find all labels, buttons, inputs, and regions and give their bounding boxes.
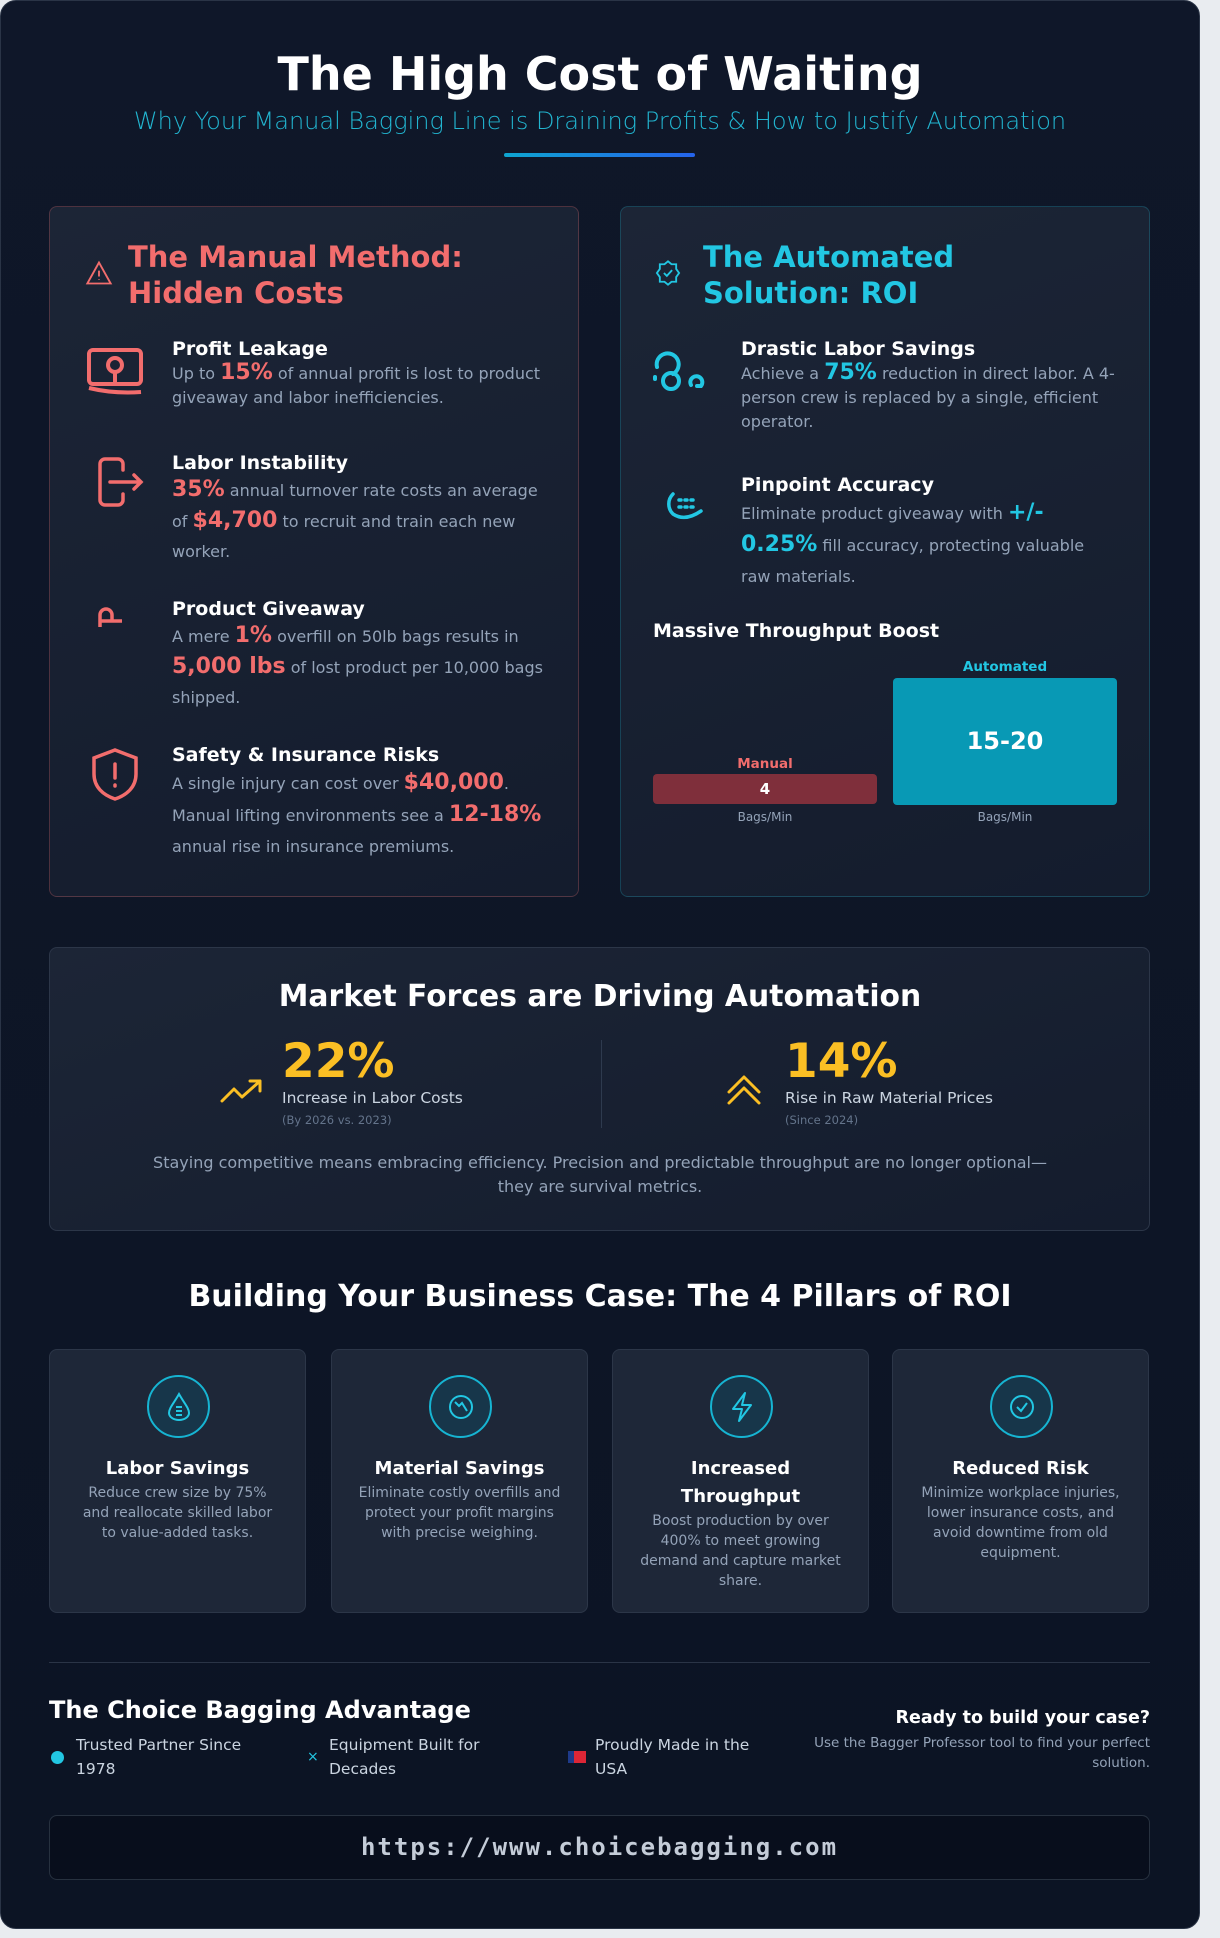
divider [601,1040,602,1128]
item: usa: Proudly Made in the USA [595,1736,749,1778]
title: The High Cost of Waiting [277,47,922,101]
heading: automated: Solution: ROI [703,276,918,310]
automated bar [893,659,1117,824]
manual bar: Bags/Min [738,810,792,824]
manual bar [653,756,877,824]
pillar: labor savings [49,1349,306,1613]
icon: labor [147,1375,210,1438]
stat: labor costs [220,1034,463,1127]
pillar: reduced risk: Minimize workplace injuries, lower insurance costs, and avoid downtime from old equipment. [921,1485,1120,1561]
heading: 4 pillars: Building Your Business Case: The 4 Pillars of ROI [188,1279,1012,1314]
stat: labor costs: 22% [282,1034,394,1089]
pillar: material savings [331,1349,588,1613]
advantage items [51,1736,749,1778]
automated bar: 15-20 [967,727,1043,755]
item: built: × [307,1749,319,1765]
stat: labor costs: (By 2026 vs. 2023) [282,1113,392,1127]
pillar: labor savings: Reduce crew size by 75% and reallocate skilled labor to value-added tasks. [83,1485,272,1541]
icon: badge check [656,260,680,286]
heading: market forces: Market Forces are Driving Automation [279,979,921,1014]
item: labor instability: Labor Instability [172,452,348,474]
item: pinpoint accuracy [667,474,1084,586]
pillar: throughput [612,1349,869,1613]
manual bar: Manual [737,756,793,772]
item: product giveaway [98,598,543,707]
text: market summary: Staying competitive means embracing efficiency. Precision and predictable throughput are no longer optional—they are survival metrics. [153,1153,1047,1196]
call to action: Ready to build your case? [896,1708,1150,1728]
stat: raw materials: Rise in Raw Material Prices [785,1089,993,1107]
manual bar: 4 [760,780,770,798]
heading: manual: Hidden Costs [128,276,344,310]
pillar: throughput: Increased [691,1458,790,1479]
item: safety risks [92,744,541,856]
stat: raw materials: 14% [785,1034,898,1089]
item: labor instability [98,452,538,561]
heading: automated [703,240,954,310]
automated bar: Bags/Min [978,810,1032,824]
bar chart: throughput [653,659,1117,824]
stat: raw materials: (Since 2024) [785,1113,858,1127]
item: pinpoint accuracy: Eliminate product giveaway with +/- 0.25% fill accuracy, protecting valuable raw materials. [741,500,1084,586]
panel: market forces [49,947,1150,1231]
pillar: material savings: Eliminate costly overfills and protect your profit margins with precise weighing. [359,1485,560,1541]
icon: lightning [710,1375,773,1438]
item: product giveaway: Product Giveaway [172,598,365,620]
item: safety risks: Safety & Insurance Risks [172,744,439,766]
icon: material [429,1375,492,1438]
pillar: reduced risk [892,1349,1149,1613]
item: product giveaway: A mere 1% overfill on 50lb bags results in 5,000 lbs of lost product per 10,000 bags shipped. [172,623,543,707]
pillar: reduced risk: Reduced Risk [952,1458,1089,1479]
stat: labor costs: Increase in Labor Costs [282,1089,463,1107]
icon: warning [86,260,112,284]
item: labor savings [653,338,1115,431]
url box [49,1815,1150,1880]
panel: manual method [49,206,579,897]
icon: check [990,1375,1053,1438]
item: profit leakage: Profit Leakage [172,338,328,360]
heading: automated: The Automated [703,240,954,274]
pillar: throughput: Boost production by over 400% to meet growing demand and capture market share. [640,1513,841,1589]
divider [49,1662,1150,1663]
automated bar: Automated [963,659,1047,675]
pillar: throughput: Throughput [681,1486,800,1507]
accent bar [504,153,695,157]
panel: automated solution [620,206,1150,897]
call to action: Use the Bagger Professor tool to find your perfect solution. [814,1735,1150,1771]
item: profit leakage [87,338,540,407]
item: trusted: Trusted Partner Since 1978 [76,1736,241,1778]
pillar: material savings: Material Savings [375,1458,544,1479]
heading: manual [128,240,463,310]
chart heading: Massive Throughput Boost [653,620,939,642]
heading: advantage: The Choice Bagging Advantage [49,1696,471,1724]
item: profit leakage: Up to 15% of annual profit is lost to product giveaway and labor inefficiencies. [172,360,540,407]
item: labor instability: 35% annual turnover rate costs an average of $4,700 to recruit and train each new worker. [172,477,538,561]
subtitle: Why Your Manual Bagging Line is Draining Profits & How to Justify Automation [134,107,1066,135]
item: safety risks: A single injury can cost over $40,000. Manual lifting environments see a 12-18% annual rise in insurance premiums. [172,770,541,856]
item: built: Equipment Built for Decades [329,1736,479,1778]
url box: https://www.choicebagging.com [361,1833,838,1861]
stat: raw materials [727,1034,993,1127]
call to action [814,1708,1150,1771]
item: labor savings: Achieve a 75% reduction in direct labor. A 4-person crew is replaced by a single, efficient operator. [741,360,1115,431]
heading: manual: The Manual Method: [128,240,463,274]
item: labor savings: Drastic Labor Savings [741,338,975,360]
item: pinpoint accuracy: Pinpoint Accuracy [741,474,934,496]
pillar: labor savings: Labor Savings [106,1458,249,1479]
